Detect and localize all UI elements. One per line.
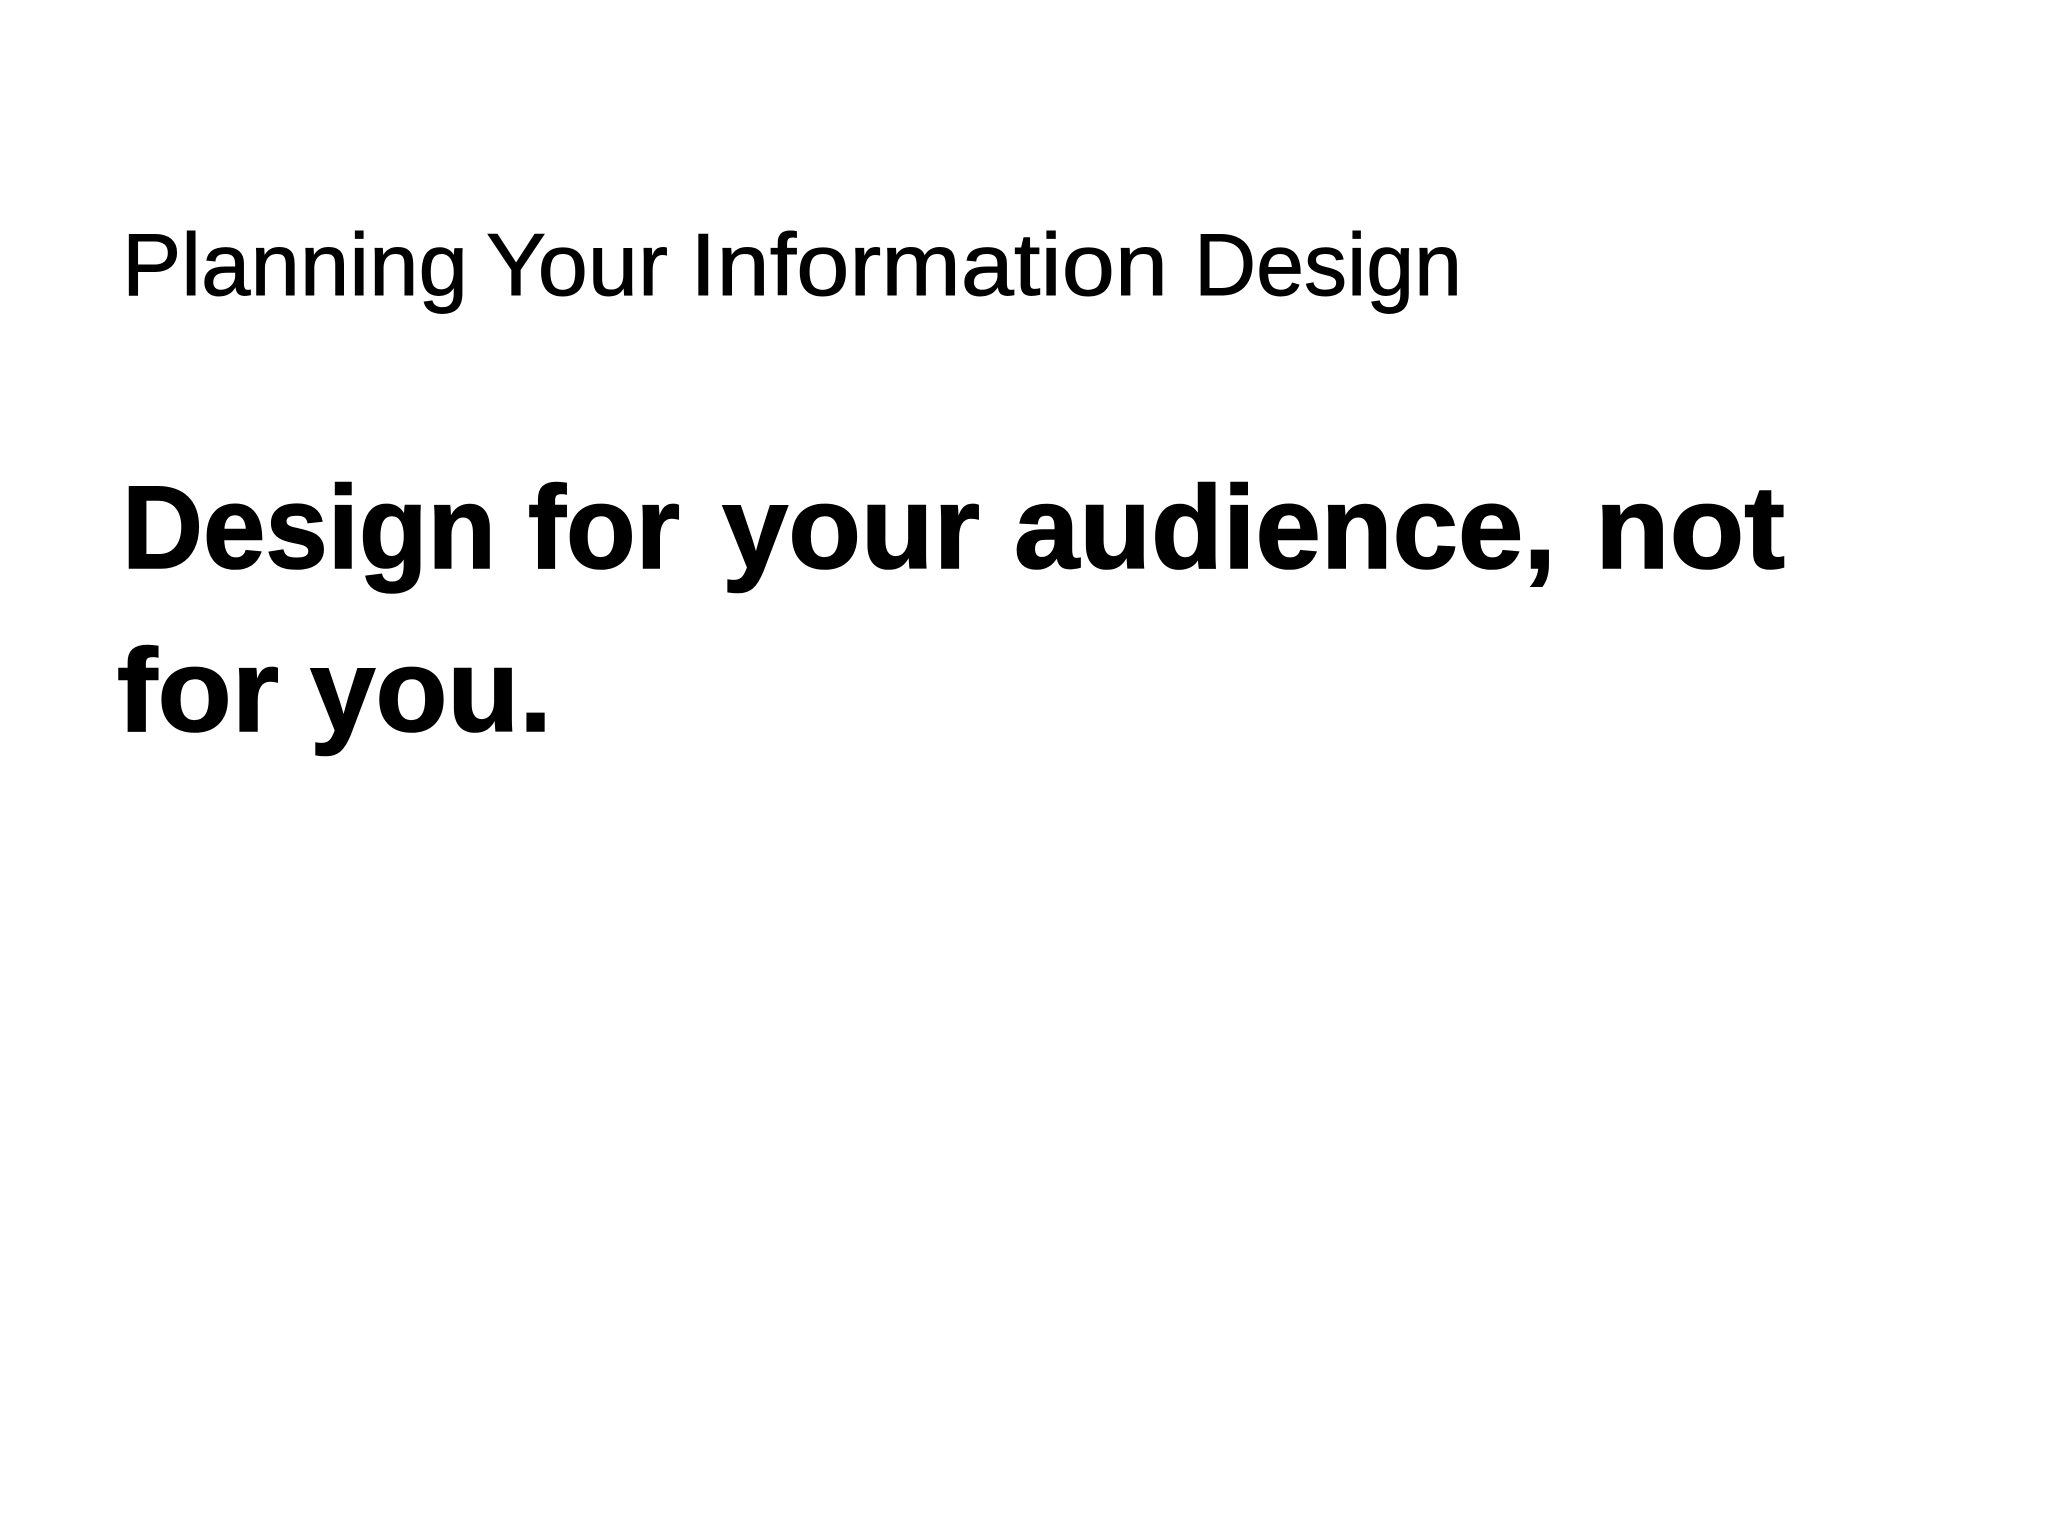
heading: Design for your audience, not for you.	[117, 462, 1785, 757]
heading line 2: for	[117, 625, 279, 757]
title: Planning Your Information Design: Your	[486, 215, 668, 314]
title: Planning Your Information Design: Information	[690, 215, 1168, 314]
heading line 1: for	[528, 462, 680, 594]
heading line 1: audience,	[1014, 462, 1556, 594]
heading line 2: you.	[310, 625, 552, 757]
title: Planning Your Information Design: Planning	[122, 215, 468, 314]
title: Planning Your Information Design: Design	[1194, 215, 1462, 314]
heading line 1: your	[722, 462, 980, 594]
heading line 1: Design	[122, 462, 496, 594]
heading line 2	[117, 625, 552, 757]
heading line 1: not	[1595, 462, 1785, 594]
heading line 1	[122, 462, 1785, 594]
title: Planning Your Information Design	[122, 215, 1462, 314]
